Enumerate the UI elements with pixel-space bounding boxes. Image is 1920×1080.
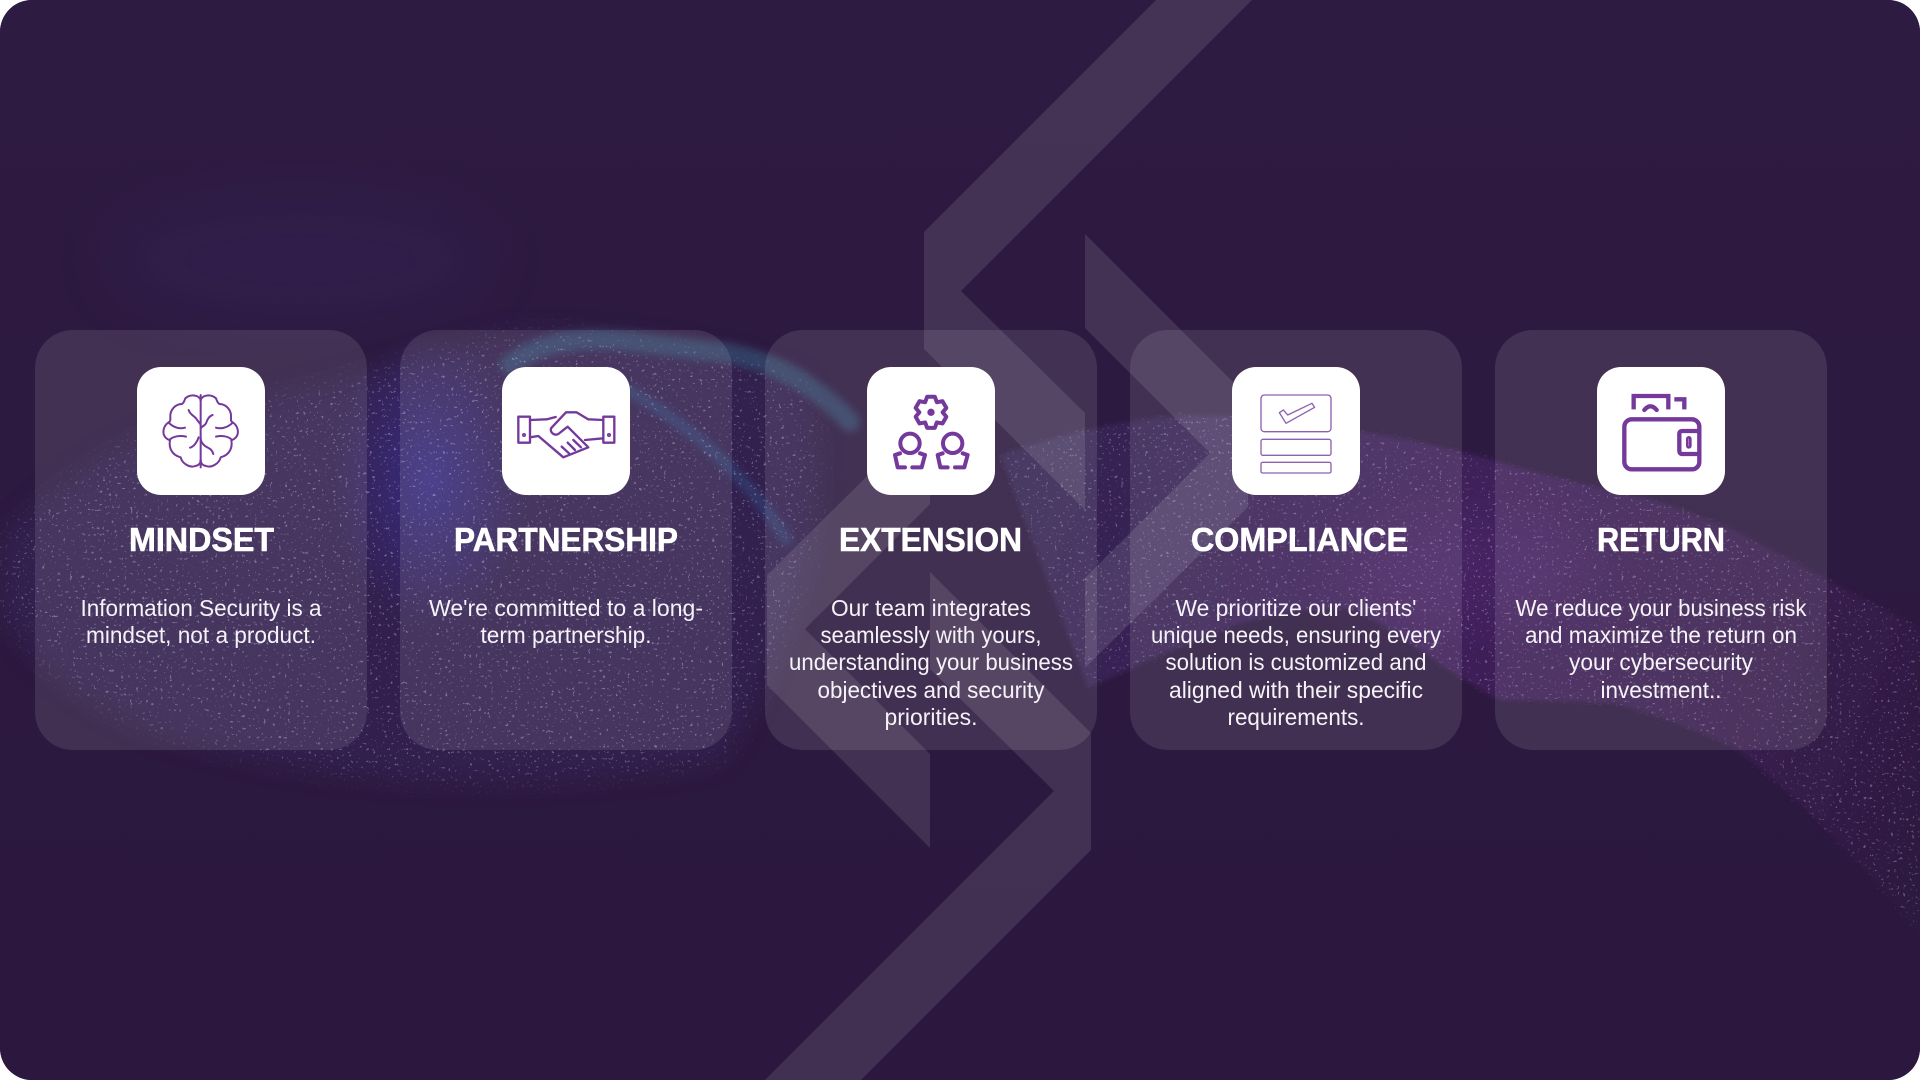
body text: mindset: Information Security is a — [80, 595, 322, 621]
panel: compliance — [1130, 330, 1462, 750]
body text: return: your cybersecurity — [1569, 649, 1753, 675]
body text: partnership: term partnership. — [480, 622, 652, 648]
body text: extension: objectives and security — [818, 677, 1045, 703]
icon: handshake — [502, 367, 630, 495]
body text: compliance: requirements. — [1228, 704, 1364, 730]
panel: return — [1495, 330, 1827, 750]
body text: extension: priorities. — [884, 704, 978, 730]
body text: mindset — [80, 595, 322, 648]
body text: extension — [789, 595, 1073, 730]
body text: compliance: solution is customized and — [1166, 649, 1426, 675]
body text: mindset: mindset, not a product. — [86, 622, 316, 648]
body text: extension: understanding your business — [789, 649, 1073, 675]
body text: extension: seamlessly with yours, — [820, 622, 1042, 648]
body text: extension: Our team integrates — [831, 595, 1031, 621]
icon: checklist form — [1232, 367, 1360, 495]
body text: compliance — [1151, 595, 1441, 730]
icon: wallet — [1597, 367, 1725, 495]
body text: partnership: We're committed to a long- — [429, 595, 703, 621]
panel: mindset — [35, 330, 367, 750]
body text: return: investment.. — [1600, 677, 1722, 703]
logo chevrons — [763, 0, 1252, 1080]
body text: return: We reduce your business risk — [1516, 595, 1807, 621]
body text: partnership — [429, 595, 703, 648]
heading: extension: EXTENSION — [839, 521, 1022, 558]
body text: return — [1516, 595, 1807, 703]
icon: team with gear — [867, 367, 995, 495]
body text: compliance: We prioritize our clients' — [1176, 595, 1416, 621]
body text: compliance: aligned with their specific — [1169, 677, 1423, 703]
body text: return: and maximize the return on — [1525, 622, 1797, 648]
body text: compliance: unique needs, ensuring every — [1151, 622, 1441, 648]
nebula backdrop — [0, 232, 1920, 926]
heading: partnership: PARTNERSHIP — [454, 521, 678, 558]
panel: partnership — [400, 330, 732, 750]
heading: compliance: COMPLIANCE — [1191, 521, 1408, 558]
panel: extension — [765, 330, 1097, 750]
heading: mindset: MINDSET — [129, 521, 274, 558]
heading: return: RETURN — [1597, 521, 1725, 558]
icon: brain — [137, 367, 265, 495]
